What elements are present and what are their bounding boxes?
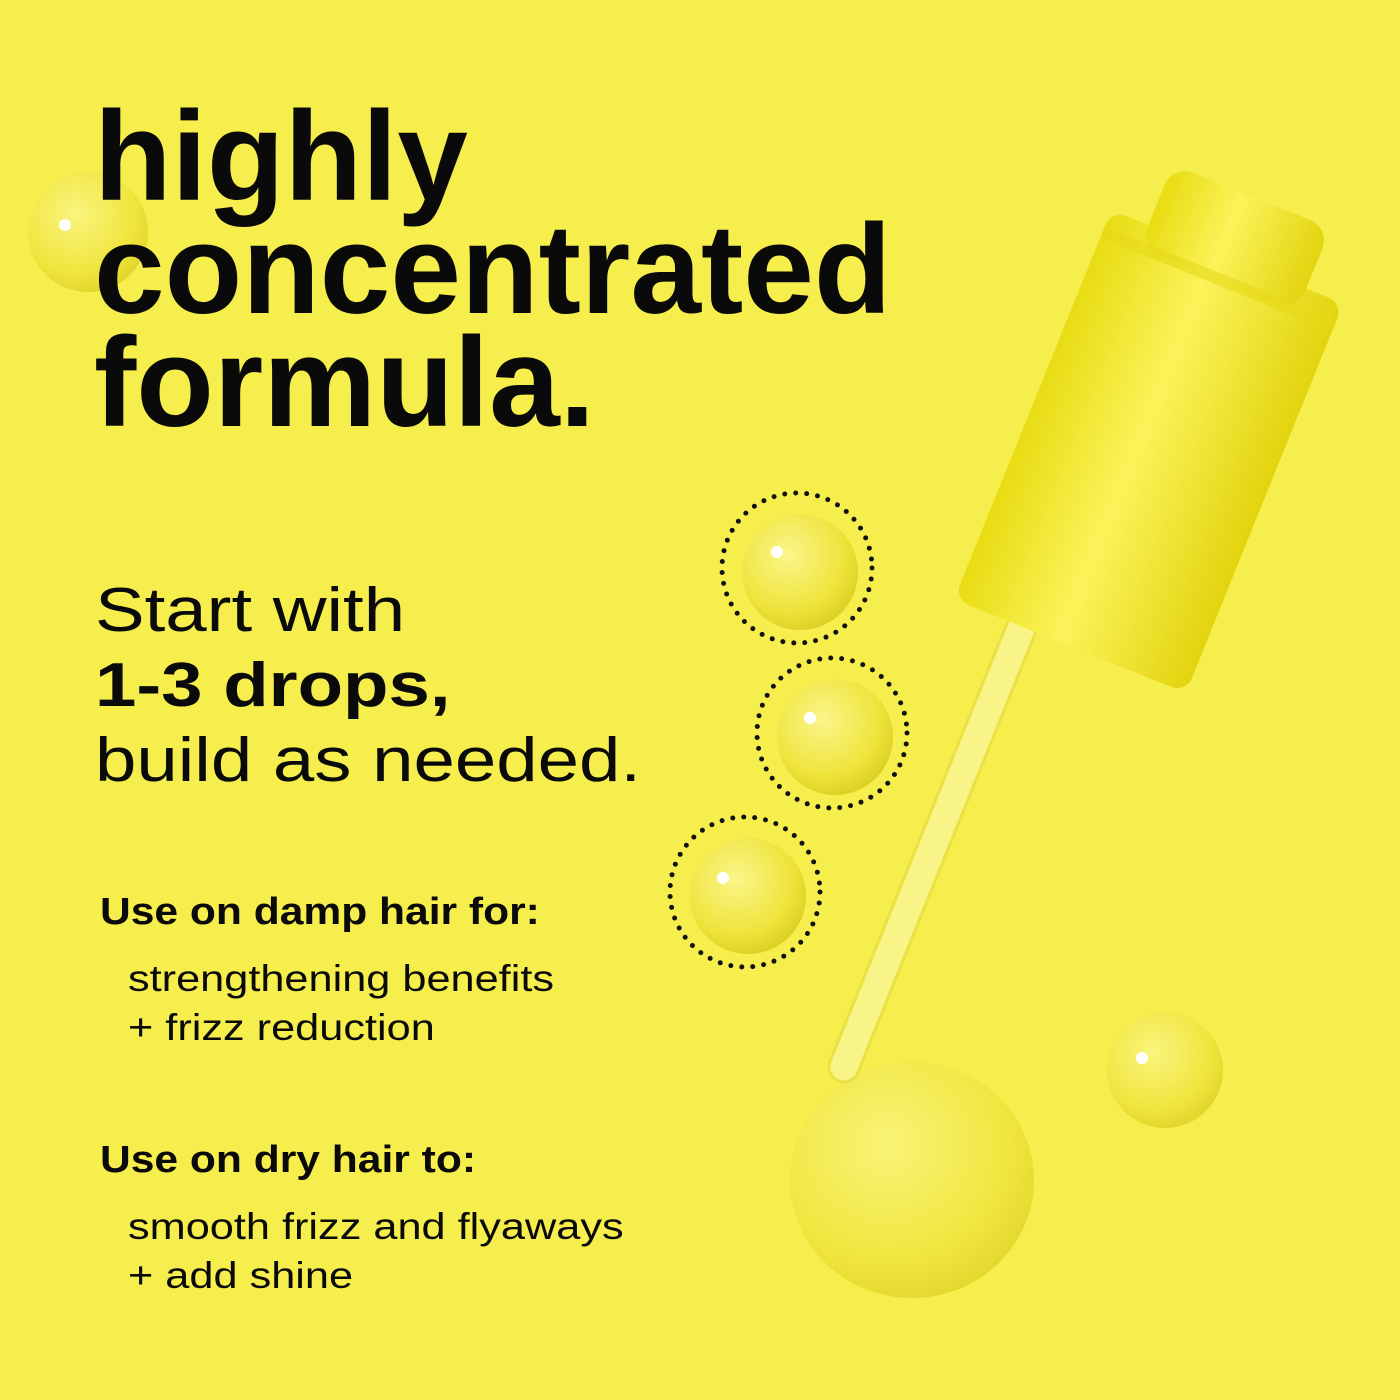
icon: dropper <box>771 150 1368 1147</box>
text: dry benefits <box>128 1206 624 1296</box>
drop: puddle <box>790 1062 1034 1298</box>
subheading <box>95 576 641 795</box>
icon: dotted drops <box>670 493 907 967</box>
drop: right <box>1107 1012 1223 1128</box>
text: damp benefits <box>128 958 554 1048</box>
heading: dry hair: Use on dry hair to: <box>100 1139 476 1181</box>
title: formula. <box>94 311 595 453</box>
text: damp benefits: strengthening benefits <box>128 958 554 999</box>
subheading: 1-3 drops, <box>95 651 451 720</box>
title <box>94 85 891 453</box>
heading: damp hair: Use on damp hair for: <box>100 891 540 933</box>
text: dry benefits: smooth frizz and flyaways <box>128 1206 624 1247</box>
subheading: build as needed. <box>95 726 641 795</box>
text: damp benefits: + frizz reduction <box>128 1007 435 1048</box>
title: highly <box>94 85 468 227</box>
drop: top left <box>28 172 148 292</box>
text: dry benefits: + add shine <box>128 1255 353 1296</box>
subheading: Start with <box>95 576 405 645</box>
title: concentrated <box>94 198 891 340</box>
